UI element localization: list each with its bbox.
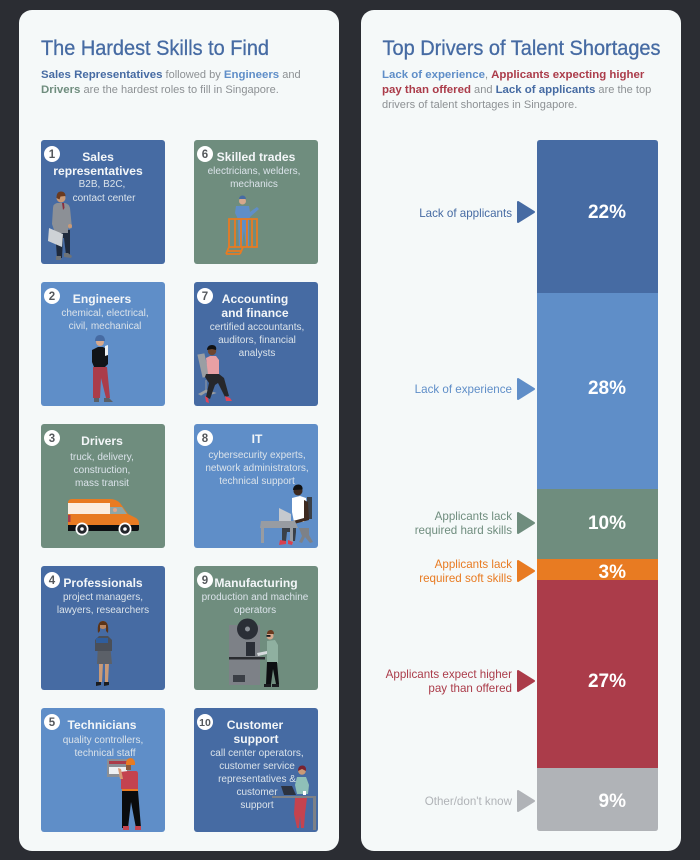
tile 3: drivers: 3 xyxy=(49,433,55,445)
panel: hardest skills xyxy=(19,10,339,851)
segment: higher pay: 27% xyxy=(588,671,626,692)
segment: higher pay: Applicants expect higher xyxy=(386,668,512,681)
intro text: talent shortages: Lack of experience, Applicants expecting higher xyxy=(382,69,645,81)
tile 6: skilled trades: mechanics xyxy=(230,179,278,190)
tile 8: IT: IT xyxy=(252,432,263,446)
tile 8: IT: 8 xyxy=(202,433,209,445)
segment: lack of experience: 28% xyxy=(588,378,626,399)
tile 1: sales representatives: contact center xyxy=(73,193,136,204)
tile 3: drivers: construction, xyxy=(74,465,130,476)
tile 1: sales representatives: representatives xyxy=(53,164,143,178)
tile 8: IT: technical support xyxy=(219,476,295,487)
segment: lack of applicants: 22% xyxy=(588,202,626,223)
segment: lack of experience: Lack of experience xyxy=(415,383,512,396)
tile 5: technicians xyxy=(41,708,165,832)
tile 9: manufacturing: Manufacturing xyxy=(214,576,298,590)
tile 6: skilled trades: electricians, welders, xyxy=(208,166,300,177)
tile 6: skilled trades: Skilled trades xyxy=(217,150,296,164)
tile 10: customer support: call center operators, xyxy=(210,748,304,759)
segment: other: Other/don't know xyxy=(425,795,513,808)
tile 10: customer support: Customer xyxy=(227,718,284,732)
tile 4: professionals: lawyers, researchers xyxy=(57,605,149,616)
intro text: talent shortages: drivers of talent shortages in Singapore. xyxy=(382,99,577,111)
icon: seated person xyxy=(198,345,232,403)
tile 1: sales representatives: Sales xyxy=(82,150,114,164)
icon: van xyxy=(68,499,139,536)
tile 3: drivers: mass transit xyxy=(75,478,129,489)
panel: talent shortages xyxy=(361,10,681,851)
tile 1: sales representatives: B2B, B2C, xyxy=(79,179,125,190)
tile 4: professionals: 4 xyxy=(49,575,56,587)
tile 3: drivers: Drivers xyxy=(81,434,123,448)
tile 8: IT: cybersecurity experts, xyxy=(208,450,306,461)
intro text: hardest skills: Sales Representatives followed by Engineers and xyxy=(41,69,301,81)
segment: lack of applicants: Lack of applicants xyxy=(419,207,512,220)
tile 2: engineers xyxy=(41,282,165,406)
icon: engineer xyxy=(92,335,113,402)
tile 2: engineers: Engineers xyxy=(73,292,132,306)
tile 8: IT xyxy=(194,424,318,548)
tile 5: technicians: quality controllers, xyxy=(63,735,143,746)
tile 10: customer support: representatives & xyxy=(218,774,296,785)
tile 5: technicians: Technicians xyxy=(67,718,137,732)
intro text: hardest skills: Drivers are the hardest roles to fill in Singapore. xyxy=(41,84,279,96)
tile 3: drivers: truck, delivery, xyxy=(70,452,134,463)
tile 2: engineers: 2 xyxy=(49,291,55,303)
segment: soft skills: 3% xyxy=(599,562,626,583)
tile 5: technicians: technical staff xyxy=(75,748,136,759)
tile 7: accounting and finance: certified accountants, xyxy=(210,322,304,333)
segment: higher pay: pay than offered xyxy=(428,682,512,695)
tile 7: accounting and finance: analysts xyxy=(239,348,275,359)
tile 5: technicians: 5 xyxy=(49,717,56,729)
icon: machine operator xyxy=(229,618,279,687)
intro text: talent shortages xyxy=(382,69,651,111)
tile 10: customer support: customer service xyxy=(219,761,295,772)
segment: lack of experience xyxy=(415,293,658,489)
tile 8: IT: network administrators, xyxy=(205,463,309,474)
tile 6: skilled trades xyxy=(194,140,318,264)
heading: talent shortages: Top Drivers of Talent Shortages xyxy=(382,36,660,60)
icon: professional woman xyxy=(95,621,112,686)
tile 9: manufacturing: production and machine xyxy=(202,592,309,603)
icon: technician at panel xyxy=(107,758,141,830)
heading: hardest skills: The Hardest Skills to Find xyxy=(41,36,269,60)
tile 10: customer support: 10 xyxy=(199,717,211,729)
icon: person at laptop xyxy=(260,484,313,545)
tile 4: professionals: project managers, xyxy=(63,592,143,603)
tile 7: accounting and finance: and finance xyxy=(221,306,289,320)
segment: soft skills: Applicants lack xyxy=(435,558,512,571)
tile 1: sales representatives: 1 xyxy=(49,149,56,161)
segment: other: 9% xyxy=(599,791,626,812)
icon: support agent at desk xyxy=(272,766,316,830)
tile 2: engineers: civil, mechanical xyxy=(69,321,141,332)
intro text: hardest skills xyxy=(41,69,301,96)
tile 9: manufacturing xyxy=(194,566,318,690)
segment: hard skills: required hard skills xyxy=(415,524,512,537)
icon: salesperson xyxy=(48,192,72,260)
tile 10: customer support: support xyxy=(233,732,279,746)
tile 7: accounting and finance xyxy=(194,282,318,406)
tile 4: professionals xyxy=(41,566,165,690)
tile 6: skilled trades: 6 xyxy=(202,149,208,161)
tile 10: customer support: support xyxy=(240,800,274,811)
stacked bar chart xyxy=(386,140,658,831)
segment: hard skills: Applicants lack xyxy=(435,510,512,523)
segment: other xyxy=(425,768,658,831)
tile 7: accounting and finance: 7 xyxy=(202,291,208,303)
tile 10: customer support: customer xyxy=(236,787,278,798)
tile 9: manufacturing: operators xyxy=(234,605,276,616)
tile 10: customer support xyxy=(194,708,318,832)
tile 7: accounting and finance: Accounting xyxy=(222,292,288,306)
segment: soft skills: required soft skills xyxy=(419,572,512,585)
intro text: talent shortages: pay than offered and Lack of applicants are the top xyxy=(382,84,651,96)
segment: hard skills xyxy=(415,489,658,559)
segment: soft skills xyxy=(419,558,658,585)
segment: higher pay xyxy=(386,580,658,768)
tile 4: professionals: Professionals xyxy=(63,576,143,590)
icon: welder on platform xyxy=(226,196,259,254)
tile 9: manufacturing: 9 xyxy=(202,575,208,587)
tile 1: sales representatives xyxy=(41,140,165,264)
segment: hard skills: 10% xyxy=(588,513,626,534)
segment: lack of applicants xyxy=(419,140,658,293)
tile 3: drivers xyxy=(41,424,165,548)
tile 7: accounting and finance: auditors, financial xyxy=(218,335,296,346)
tile 2: engineers: chemical, electrical, xyxy=(61,308,149,319)
